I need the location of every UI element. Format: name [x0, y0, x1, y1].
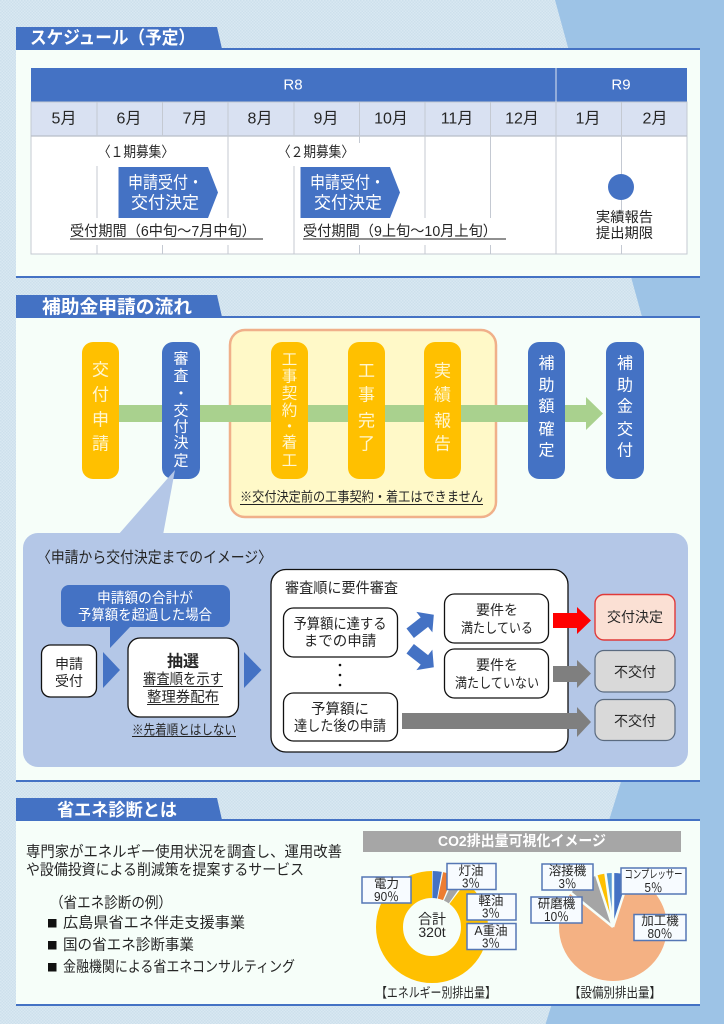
step: construction contract: 事: [282, 368, 297, 386]
recruitment period 1: 受付期間（6中旬～7月中旬）: [70, 223, 256, 240]
box: applications before budget reached: 予算額に達する: [294, 616, 386, 633]
recruitment period 1: [70, 144, 263, 240]
label: heavy oil A: 3％: [482, 936, 500, 950]
flow arrow: [100, 397, 603, 430]
schedule table: R9: [611, 76, 631, 94]
chart title: CO2排出量可視化イメージ: [438, 832, 606, 850]
step: amount confirmed: 定: [538, 442, 555, 460]
box: application received: 申請: [55, 656, 83, 672]
schedule table: 9月: [314, 110, 338, 128]
chart title: [363, 831, 681, 852]
arrow: [103, 652, 120, 688]
panel: application flow: [16, 295, 700, 782]
label: electricity: [362, 877, 411, 904]
subheading: 〈申請から交付決定までのイメージ〉: [37, 548, 272, 566]
step: subsidy payment: 交: [617, 420, 633, 438]
schedule table: 7月: [183, 110, 207, 128]
examples list: 金融機関による省エネコンサルティング: [63, 958, 295, 976]
label: grinder: [531, 897, 582, 924]
label: kerosene: [447, 864, 496, 890]
result: not granted: 不交付: [614, 713, 656, 729]
label: compressor: コンプレッサー: [624, 868, 682, 881]
step: subsidy payment: [606, 342, 644, 479]
box: applications before budget reached: [284, 608, 398, 657]
box: lottery: [128, 638, 238, 717]
result: granted: 交付決定: [607, 609, 663, 625]
examples list: 広島県省エネ伴走支援事業: [63, 914, 245, 932]
ellipsis dots: [339, 664, 341, 686]
panel: requirement review: [271, 570, 568, 752]
milestone: report deadline: 実績報告: [596, 209, 653, 226]
step: review and grant decision: [162, 342, 200, 479]
schedule table: 12月: [505, 110, 539, 128]
arrow: [244, 652, 262, 688]
label: light oil: [467, 894, 516, 920]
label: processing machine: 80％: [648, 927, 672, 941]
label: welder: 3％: [558, 877, 576, 891]
label: welder: 溶接機: [549, 863, 587, 878]
note: no contract before decision: ※交付決定前の工事契約・着工はできません: [240, 488, 483, 504]
label: processing machine: 加工機: [641, 914, 679, 928]
step: subsidy payment: 付: [617, 442, 633, 460]
panel: requirement review: 審査順に要件審査: [285, 580, 398, 597]
box: application received: 受付: [55, 673, 83, 689]
box: requirements met: 満たしている: [461, 620, 533, 636]
box: applications after budget reached: 達した後の申請: [294, 718, 386, 735]
label: heavy oil A: A重油: [474, 923, 508, 938]
pie chart: by equipment: [531, 863, 686, 1000]
result: not granted: [595, 700, 675, 740]
arrow: up-right: [402, 605, 442, 643]
label: grinder: 研磨機: [538, 897, 576, 911]
label: electricity: 電力: [374, 877, 399, 891]
description text: や設備投資による削減策を提案するサービス: [26, 862, 304, 878]
recruitment period 1: 申請受付・: [128, 174, 203, 192]
recruitment period 2: 受付期間（9上旬～10月上旬）: [303, 223, 497, 240]
schedule table: 8月: [248, 110, 272, 128]
step: amount confirmed: [528, 342, 565, 479]
step: review and grant decision: 審: [173, 350, 189, 368]
panel: schedule: [16, 27, 700, 278]
box: applications after budget reached: 予算額に: [311, 701, 369, 718]
step: review and grant decision: ・: [173, 386, 189, 402]
step: construction contract: 工: [282, 452, 297, 470]
label: compressor: 5％: [644, 881, 662, 895]
description text: 専門家がエネルギー使用状況を調査し、運用改善: [26, 844, 342, 860]
caption: 【設備別排出量】: [569, 986, 661, 1000]
step: construction contract: 着: [282, 434, 297, 452]
label: welder: [542, 863, 593, 891]
box: requirements met: [444, 594, 548, 643]
callout: budget exceeded: 申請額の合計が: [97, 590, 193, 607]
schedule table: 10月: [374, 110, 408, 128]
arrow: long gray to no grant: [402, 707, 591, 737]
heading: flow: [16, 295, 222, 318]
callout: budget exceeded: [61, 585, 230, 648]
milestone: report deadline: [596, 174, 653, 242]
schedule table: 6月: [117, 110, 141, 128]
step: review and grant decision: 決: [173, 434, 189, 452]
heading: diagnosis: 省エネ診断とは: [57, 800, 177, 820]
step: performance report: [424, 342, 461, 479]
donut center label: [418, 911, 446, 940]
step: construction complete: 完: [358, 412, 375, 430]
step: application: 交: [92, 360, 109, 380]
step: review and grant decision: 付: [173, 418, 189, 436]
step: amount confirmed: 補: [538, 354, 555, 372]
step: performance report: 実: [434, 362, 451, 380]
callout: budget exceeded: 予算額を超過した場合: [78, 607, 212, 624]
note: not first come first served: ※先着順とはしない: [132, 722, 236, 738]
box: application received: [42, 645, 96, 697]
step: subsidy payment: 金: [617, 398, 633, 416]
step: review and grant decision: 定: [173, 452, 189, 470]
label: kerosene: 灯油: [458, 864, 484, 878]
step: construction complete: 了: [358, 434, 375, 454]
step: application: 請: [92, 434, 109, 454]
label: kerosene: 3％: [462, 876, 480, 890]
label: light oil: 3％: [482, 906, 500, 920]
schedule table: R8: [283, 76, 303, 94]
step: application: 付: [92, 386, 109, 404]
heading: flow: 補助金申請の流れ: [42, 296, 192, 318]
arrow: gray to no grant: [553, 660, 591, 688]
donut center label: 320t: [418, 924, 446, 940]
step: application: 申: [92, 410, 109, 430]
description text: [26, 844, 342, 878]
step: construction contract: 工: [282, 352, 297, 368]
step: amount confirmed: 助: [538, 376, 555, 394]
label: processing machine: [634, 914, 686, 941]
arrow: down-right: [402, 639, 442, 677]
box: lottery: 抽選: [167, 652, 199, 670]
result: granted: [595, 594, 675, 640]
schedule table: [31, 68, 687, 254]
result: not granted: 不交付: [614, 664, 656, 680]
step: review and grant decision: 交: [173, 402, 189, 420]
heading: schedule: スケジュール（予定）: [30, 28, 195, 48]
step: construction complete: 事: [358, 386, 375, 404]
recruitment period 2: 交付決定: [314, 194, 382, 212]
box: requirements met: 要件を: [476, 602, 518, 618]
step: review and grant decision: 査: [173, 368, 189, 384]
recruitment period 2: 〈２期募集〉: [278, 144, 354, 161]
schedule table: 1月: [576, 110, 600, 128]
panel: image of process up to decision: [23, 533, 688, 767]
arrow: red to grant: [553, 607, 591, 634]
heading: diagnosis: [16, 798, 222, 820]
step: amount confirmed: 額: [538, 398, 555, 416]
step: performance report: 報: [434, 412, 451, 430]
result: not granted: [595, 650, 675, 692]
recruitment period 2: 申請受付・: [310, 174, 385, 192]
box: applications after budget reached: [284, 693, 398, 741]
recruitment period 1: 交付決定: [131, 194, 199, 212]
caption: 【エネルギー別排出量】: [376, 986, 496, 1000]
step: subsidy payment: 補: [617, 354, 633, 372]
box: lottery: 審査順を示す: [143, 671, 223, 688]
step: construction complete: 工: [358, 362, 375, 380]
step: performance report: 告: [434, 434, 451, 454]
box: requirements not met: 要件を: [476, 657, 518, 673]
label: electricity: 90％: [374, 890, 399, 904]
label: light oil: 軽油: [478, 894, 504, 908]
callout pointer: [118, 470, 175, 535]
step: construction complete: [348, 342, 385, 479]
step: construction contract: 約: [282, 402, 297, 420]
label: compressor: [621, 868, 686, 895]
schedule table: 5月: [52, 110, 76, 128]
donut center label: 合計: [418, 911, 446, 927]
label: grinder: 10％: [544, 910, 569, 924]
donut chart: by energy: [362, 864, 516, 1000]
step: construction contract: ・: [282, 418, 297, 436]
step: performance report: 績: [434, 386, 451, 404]
highlighted construction box: [230, 330, 496, 517]
step: amount confirmed: 確: [538, 420, 555, 438]
label: heavy oil A: [467, 923, 516, 950]
schedule table: 11月: [441, 110, 473, 128]
box: requirements not met: 満たしていない: [455, 675, 539, 691]
box: requirements not met: [444, 649, 548, 698]
panel: energy-saving diagnosis: [16, 798, 700, 1006]
milestone: report deadline: 提出期限: [596, 225, 653, 242]
examples list: 国の省エネ診断事業: [63, 936, 194, 954]
step: construction contract: 契: [282, 384, 297, 402]
recruitment period 2: [278, 144, 506, 240]
schedule table: 2月: [643, 110, 667, 128]
box: applications before budget reached: までの申請: [304, 633, 376, 650]
examples list: （省エネ診断の例）: [50, 894, 172, 912]
step: subsidy payment: 助: [617, 376, 633, 394]
step: application: [82, 342, 119, 479]
recruitment period 1: 〈１期募集〉: [98, 144, 174, 161]
step: construction contract: [271, 342, 308, 479]
examples list: [48, 894, 295, 976]
box: lottery: 整理券配布: [147, 689, 219, 706]
